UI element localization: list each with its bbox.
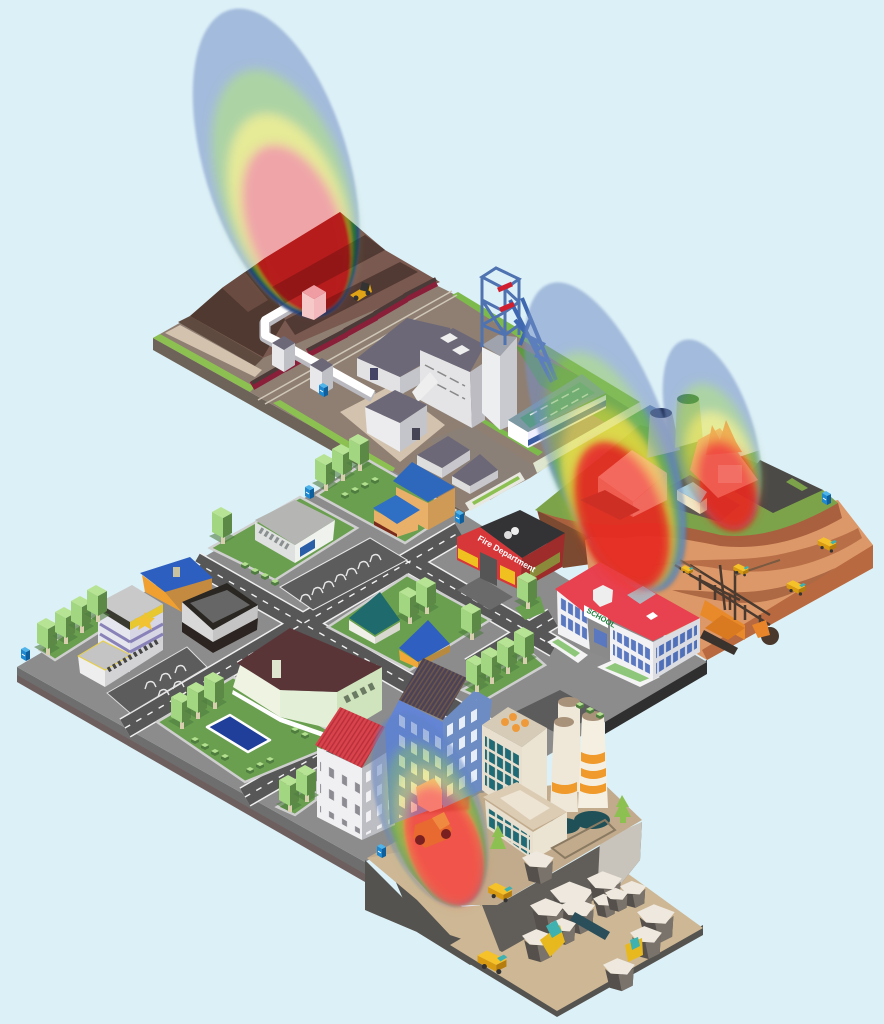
plume core over heap [247,212,361,319]
house with blue roof top lot [373,462,455,537]
panel: quarry [365,780,703,1017]
cooling towers [647,394,703,458]
conveyor head tower [302,285,326,320]
orange blue cottage [399,620,450,668]
pink warehouse [580,450,667,520]
fire department: Fire Department [476,533,538,574]
parking lots [107,538,600,735]
school: SCHOOL [585,606,618,630]
factory tower [482,707,547,820]
main processing building [412,328,485,428]
warehouse [357,318,455,395]
plume ground tint: mine east and pit [546,405,688,594]
conveyor transfer towers [272,336,333,395]
bucket wheel excavator [675,560,780,655]
heat plume: quarry [348,697,512,923]
police station [78,585,163,687]
headframe [482,268,556,382]
small bay building [677,482,707,514]
blue apartment [385,658,492,825]
small sheds [417,436,498,494]
panel: open pit terraces [535,425,873,660]
factory pipe yard [552,820,615,858]
coal heap [178,212,440,366]
coal train [252,279,436,386]
office building with green roof garden [508,374,606,448]
orange house blue roof west [140,557,213,612]
plume ground tint: quarry [390,795,488,908]
clinic [255,500,335,563]
plume ground tint: pit east [700,450,763,534]
lower conveyor building [365,390,427,452]
factory low building [483,782,567,860]
red roof apartment [315,707,395,840]
pit haul trucks [681,537,837,596]
mine shaft tower [482,335,517,430]
quarry vehicles [416,778,643,974]
orange dump truck in plume [413,812,452,848]
hedges [191,477,604,774]
heat plume: mine east [491,263,719,611]
red power plant [690,420,758,498]
heap top stripes [272,235,418,335]
teal roof cottage [349,592,400,644]
black roof building [182,583,258,653]
heat plume: power plant [643,328,781,540]
factory chimneys [548,697,610,834]
information kiosks [21,383,831,858]
panel: city base [17,462,707,882]
rail tracks [258,291,457,404]
conifer trees at factory [490,795,631,849]
fire department [457,510,565,590]
green lots with fences [40,460,545,815]
trees [34,434,540,812]
panel: mine yard base [153,235,642,526]
conveyor [265,298,373,397]
heat plume: mine heap [160,0,392,337]
big house [232,628,382,742]
school [547,562,700,687]
yellow loader on heap [350,282,372,301]
quarry rocks [522,851,675,991]
road network [125,532,555,797]
pool [207,715,270,752]
